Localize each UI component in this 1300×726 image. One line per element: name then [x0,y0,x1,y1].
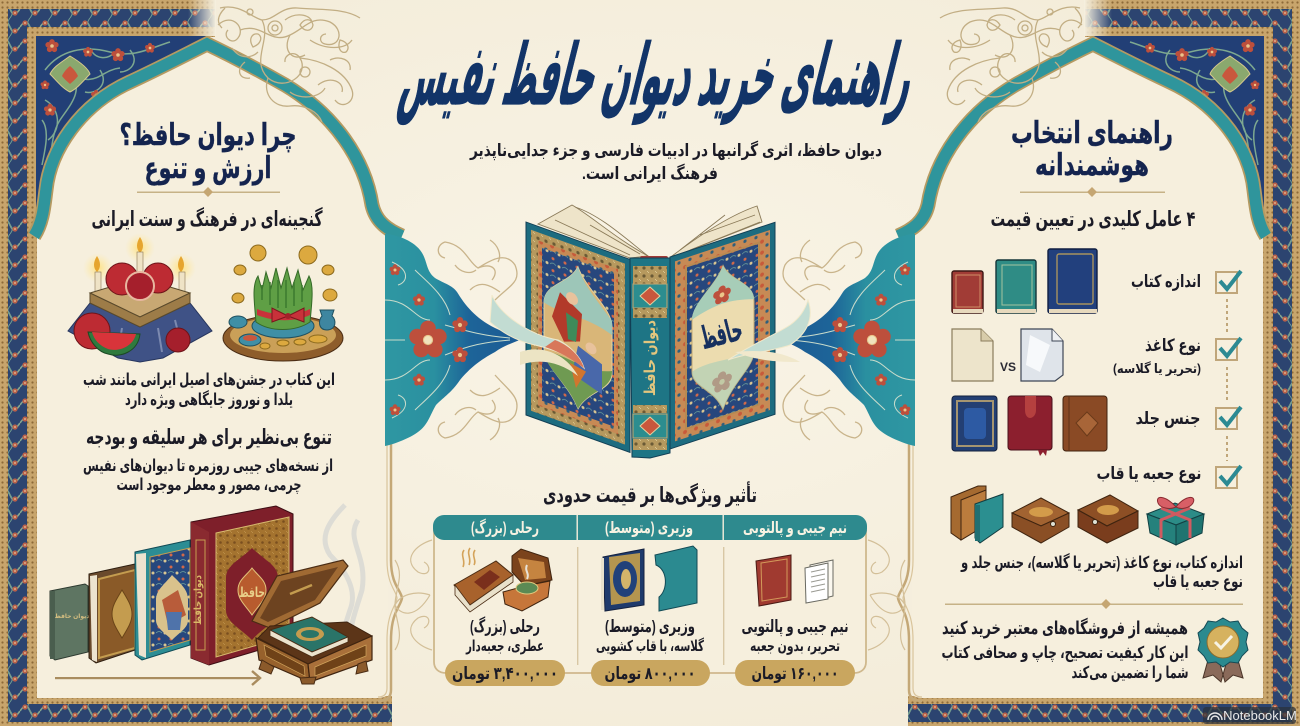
column text: rahli: عطری، جعبه‌دار [465,638,544,655]
right frame and arch [775,0,1300,726]
open book illustration [490,205,810,458]
book maroon: دیوان حافظ [193,575,204,625]
price pill 3,400,000 [445,660,565,686]
badge icon [1198,618,1248,682]
column text: pocket: تحریر، بدون جعبه [750,638,840,655]
left panel heading: ارزش و تنوع [144,152,272,186]
open book illustration: حافظ [697,312,746,356]
book green: دیوان حافظ [55,613,89,620]
smoke [325,505,363,640]
scrollwork top right [940,7,1082,122]
open book illustration: دیوان حافظ [642,320,659,396]
right panel heading: راهنمای انتخاب [1011,117,1173,150]
header bar [433,515,867,540]
left text: variety: از نسخه‌های جیبی روزمره تا دیوان‌های نفیس [83,457,333,476]
header labels [471,518,847,538]
left frame and arch [0,0,525,726]
right subheading: ۴ عامل کلیدی در تعیین قیمت [990,208,1196,231]
price section heading: تأثیر ویژگی‌ها بر قیمت حدودی [543,480,757,507]
swoosh left [490,295,584,368]
column text: pocket: نیم جیبی و پالتویی [742,617,848,637]
checkbox 4 [1216,466,1241,488]
factors summary text: نوع جعبه یا قاب [1153,573,1243,592]
price pill 160,000: ۱۶۰,۰۰۰ تومان [752,664,838,684]
column text: vaziri: گلاسه، با قاب کشویی [596,637,704,655]
column text: rahli: رحلی (بزرگ) [470,617,540,637]
left subheading: گنجینه‌ای در فرهنگ و سنت ایرانی [92,206,323,231]
side scrolls [395,540,905,650]
left text: variety: چرمی، مصور و معطر موجود است [116,476,302,495]
book maroon: حافظ [239,584,265,600]
icon: slipcase and book [951,486,1003,543]
checkbox 2 [1216,338,1241,360]
dotted connector [1226,436,1228,461]
left panel heading: چرا دیوان حافظ؟ [120,119,296,153]
left panel heading [120,119,296,186]
icon: yalda table [68,233,212,362]
scrollwork top left [218,7,360,122]
store advice: شما را تضمین می‌کند [1072,664,1188,683]
label: paper type: (تحریر یا گلاسه) [1113,361,1201,376]
right panel heading: هوشمندانه [1035,149,1149,182]
checkbox 1 [1216,271,1241,293]
divider [1020,187,1165,197]
price table [395,515,905,686]
icon: small book and papers [756,555,833,606]
left subheading 2: تنوع بی‌نظیر برای هر سلیقه و بودجه [86,426,332,449]
label: book size: اندازه کتاب [1131,272,1201,291]
factor 3: binding [952,396,1241,456]
factor 1: book size [952,249,1241,313]
book brown [89,564,135,663]
left cover [526,222,630,452]
icon: nowruz haft-sin plate [223,245,343,361]
divider [137,187,280,197]
price pill 160,000 [735,660,855,686]
dotted connector [1226,299,1228,332]
icon: paper comparison [952,329,1063,381]
column text: vaziri [596,617,704,655]
factor 2: paper type [952,329,1241,381]
left text: celebrations: یلدا و نوروز جایگاهی ویژه دارد [125,389,293,410]
label: paper type: نوع کاغذ [1145,336,1201,356]
left text: celebrations [83,371,335,410]
factor 4: box [951,464,1241,545]
header labels: وزیری (متوسط) [605,520,693,537]
column text: pocket [742,617,848,655]
label: binding: جنس جلد [1136,409,1200,428]
price pill 800,000 [591,660,710,686]
subtitle: فرهنگ ایرانی است. [582,163,718,184]
store advice: این کار کیفیت تصحیح، چاپ و صحافی کتاب [942,644,1188,663]
icon: three book sizes [952,249,1097,313]
price pill 3,400,000: ۳,۴۰۰,۰۰۰ تومان [452,664,558,684]
table outline [434,530,866,673]
factors summary text [960,552,1243,592]
icon: ornate box [1078,495,1138,543]
book maroon [191,506,293,665]
top fade right [1084,0,1112,36]
store advice [942,617,1188,683]
icon: wood box [1012,498,1069,543]
arrow [55,671,260,685]
column text: rahli [465,617,544,655]
divider [945,599,1243,609]
pages [538,205,648,258]
icon: paper comparison: VS [1000,360,1016,374]
header labels: نیم جیبی و پالتوبی [743,520,847,538]
header labels: رحلی (بزرگ) [471,518,539,537]
icon: medium book and slipcase [601,546,697,611]
top fade left [188,0,216,36]
column text: vaziri: وزیری (متوسط) [605,617,695,637]
icon: large book and box [454,548,552,612]
spine [630,258,670,458]
book green [50,584,89,660]
label: box: نوع جعبه یا قاب [1096,464,1202,484]
right cover [670,222,775,449]
checkbox 3 [1216,407,1241,429]
icon: three bindings [952,396,1107,456]
watermark [1203,707,1297,724]
illustration: row of books with perfumed box [50,505,372,685]
subtitle [469,140,882,184]
dotted connector [1226,367,1228,400]
watermark: NotebookLM [1223,708,1297,723]
store advice: همیشه از فروشگاه‌های معتبر خرید کنید [942,617,1188,639]
label: paper type [1113,336,1201,376]
perfumed box [252,560,372,684]
left text: celebrations: این کتاب در جشن‌های اصیل ایرانی مانند شب [83,371,335,390]
price pill 800,000: ۸۰۰,۰۰۰ تومان [604,664,696,684]
book teal [135,540,190,660]
subtitle: دیوان حافظ، اثری گرانبها در ادبیات فارسی و جزء جدایی‌ناپذیر [469,140,882,161]
left text: variety [83,457,333,495]
icon: gift box [1147,497,1204,545]
right panel heading [1011,117,1173,182]
swoosh right [728,300,810,360]
